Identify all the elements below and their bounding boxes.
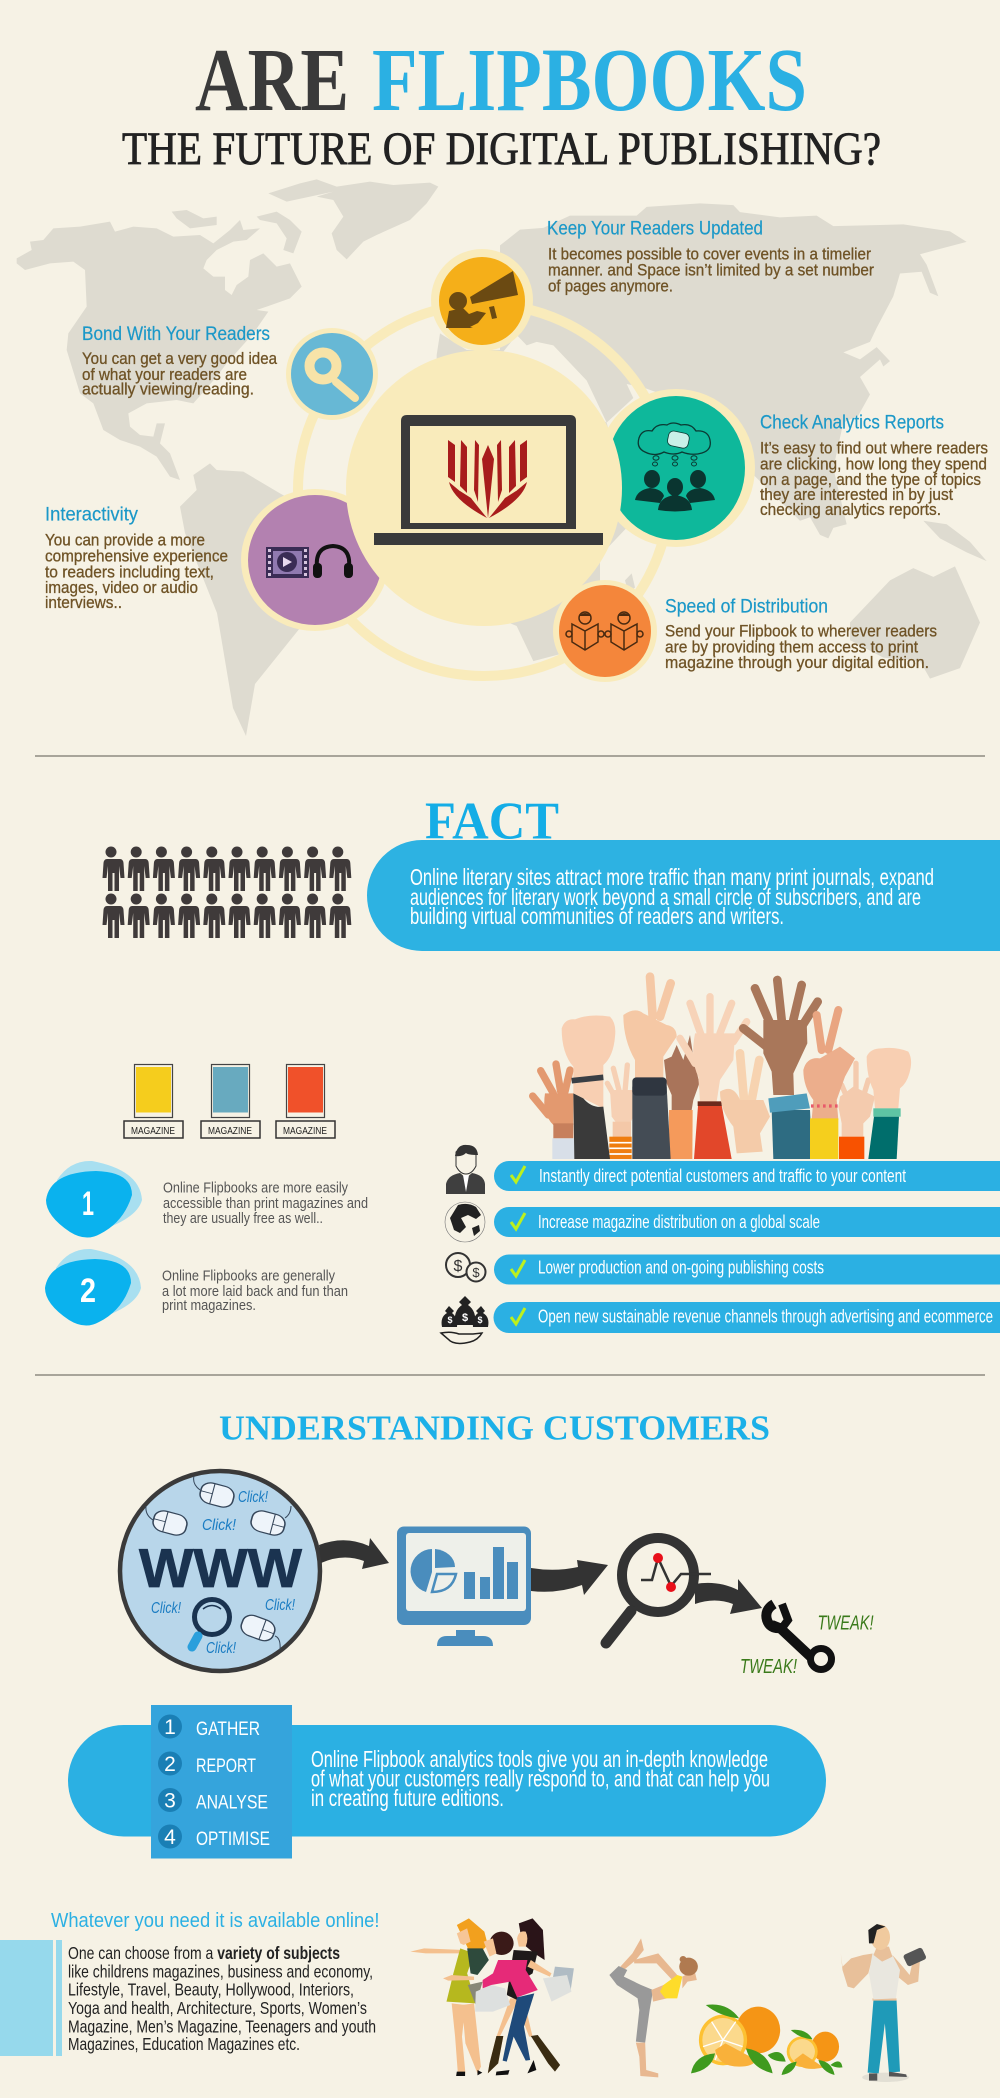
- central circle: [346, 350, 622, 626]
- icon: coins: [446, 1253, 486, 1282]
- benefit 2: Increase magazine distribution on a global scale: [538, 1212, 820, 1232]
- steps box: REPORT: [196, 1756, 256, 1777]
- hand: small light: [607, 1065, 635, 1159]
- text block: speed of distribution: Speed of Distribution: [665, 596, 828, 618]
- illustration: www clicks: WWW: [139, 1537, 302, 1599]
- text block: interactivity: to readers including text,: [45, 564, 214, 582]
- text block: bond with your readers: [82, 324, 278, 398]
- analytics callout: Online Flipbook analytics tools give you an in-depth knowledge: [311, 1746, 768, 1772]
- icon: money bags: $: [477, 1315, 483, 1325]
- text block: interactivity: comprehensive experience: [45, 548, 228, 566]
- text block: interactivity: Interactivity: [45, 504, 138, 526]
- text block: interactivity: interviews..: [45, 594, 122, 612]
- illustration: www clicks: Click!: [238, 1489, 268, 1506]
- magazine blue: [201, 1064, 260, 1138]
- icon: businessman: [446, 1145, 485, 1194]
- text block: interactivity: You can provide a more: [45, 532, 205, 550]
- text block: keep your readers updated: It becomes possible to cover events in a timelier: [548, 246, 871, 264]
- icon: people thinking about a mouse: [635, 423, 715, 512]
- icon: monitor with charts: [397, 1526, 531, 1646]
- icon: megaphone circle: [431, 249, 533, 351]
- fact callout: building virtual communities of readers and writers.: [410, 903, 784, 929]
- steps box: 3: [164, 1790, 176, 1812]
- illustration: yoga: [609, 1938, 698, 2077]
- numbered point 1: they are usually free as well..: [163, 1211, 323, 1227]
- arrow 2: [531, 1560, 608, 1595]
- icon: laptop: [374, 415, 603, 545]
- illustration: shoppers: [410, 1918, 574, 2076]
- icon: coins: $: [472, 1265, 480, 1280]
- icon: readers circle: [553, 580, 657, 682]
- hand: small left: [533, 1064, 574, 1159]
- text block: speed of distribution: magazine through your digital edition.: [665, 654, 929, 672]
- analytics callout: of what your customers really respond to, and that can help you: [311, 1766, 770, 1792]
- hand: brown peace: [664, 1035, 699, 1159]
- steps box: 1: [164, 1716, 176, 1739]
- text block: keep your readers updated: of pages anymore.: [548, 278, 673, 296]
- hand: peace pale: [720, 1053, 770, 1153]
- analytics callout: in creating future editions.: [311, 1785, 504, 1811]
- text block: keep your readers updated: Keep Your Readers Updated: [547, 218, 763, 240]
- icon: wrench with tweak labels: [740, 1604, 874, 1678]
- icon: wrench with tweak labels: TWEAK!: [818, 1612, 874, 1634]
- text block: speed of distribution: are by providing them access to print: [665, 638, 918, 656]
- illustration: raised hands: [533, 977, 911, 1159]
- ring: [298, 304, 670, 676]
- benefit 2: [494, 1207, 1000, 1237]
- text block: subjects: Magazine, Men’s Magazine, Teenagers and youth: [68, 2016, 376, 2036]
- text block: speed of distribution: Send your Flipbook to wherever readers: [665, 622, 937, 640]
- text block: interactivity: images, video or audio: [45, 579, 198, 597]
- icon: globe: [445, 1202, 485, 1242]
- arrow 3: [695, 1579, 762, 1614]
- text block: check analytics reports: they are interested in by just: [760, 486, 953, 504]
- text block: bond with your readers: of what your readers are: [82, 366, 247, 384]
- icon: coins: $: [454, 1258, 463, 1275]
- text block: subjects: One can choose from a variety of subjects: [68, 1943, 340, 1963]
- heading: understanding customers: UNDERSTANDING CUSTOMERS: [219, 1408, 770, 1448]
- numbered point 2: 2: [80, 1272, 96, 1310]
- title: FLIPBOOKS: [372, 31, 807, 130]
- numbered point 2: Online Flipbooks are generally: [162, 1268, 336, 1284]
- illustration: www clicks: Click!: [206, 1640, 236, 1657]
- title: ARE: [195, 31, 349, 130]
- illustration: www clicks: Click!: [151, 1600, 181, 1617]
- illustrations: lifestyle people and fruit: [410, 1918, 927, 2082]
- steps box: [151, 1705, 292, 1858]
- text block: subjects: like childrens magazines, business and economy,: [68, 1962, 373, 1982]
- text block: subjects: Lifestyle, Travel, Beauty, Hollywood, Interiors,: [68, 1980, 354, 2000]
- icon: analytics circle: [597, 389, 755, 547]
- steps box: OPTIMISE: [196, 1829, 270, 1850]
- text block: keep your readers updated: [547, 218, 874, 296]
- text block: interactivity: [45, 504, 228, 612]
- analytics callout: [68, 1705, 826, 1858]
- illustration: www clicks: Click!: [265, 1597, 295, 1614]
- text block: check analytics reports: It’s easy to find out where readers: [760, 440, 988, 458]
- magazine red: MAGAZINE: [283, 1125, 327, 1137]
- numbered point 1: Online Flipbooks are more easily: [163, 1180, 349, 1196]
- numbered point 2: print magazines.: [162, 1298, 256, 1314]
- arrow 1: [319, 1538, 389, 1569]
- text block: subjects: [68, 1943, 376, 2054]
- icon: wrench with tweak labels: TWEAK!: [740, 1656, 797, 1678]
- icon: magnifier circle: [286, 328, 378, 420]
- illustration: fitness man: [841, 1924, 927, 2082]
- title: [195, 31, 807, 130]
- text block: speed of distribution: [665, 596, 937, 672]
- benefit 3: Lower production and on-going publishing costs: [538, 1258, 824, 1278]
- icon: money bags: [441, 1296, 488, 1343]
- illustration: www clicks: Click!: [202, 1517, 236, 1534]
- icon: analysis magnifier: [606, 1538, 711, 1643]
- magazine blue: MAGAZINE: [208, 1125, 252, 1137]
- text block: check analytics reports: checking analytics reports.: [760, 501, 941, 519]
- heading: fact: FACT: [425, 792, 559, 850]
- world map: [17, 179, 987, 736]
- icon: interactivity circle: [241, 489, 389, 631]
- steps box: ANALYSE: [196, 1792, 268, 1814]
- hand: peace tan: [803, 1010, 855, 1159]
- benefit 4: [493, 1302, 1000, 1333]
- hand: open light: [680, 997, 747, 1159]
- numbered point 1: [46, 1161, 368, 1238]
- fact callout: [367, 840, 1000, 951]
- accent bars: [0, 1940, 62, 2056]
- text block: check analytics reports: [760, 412, 988, 519]
- hand: fist right: [867, 1048, 911, 1159]
- icon: crowd of people: [102, 846, 351, 938]
- illustration: oranges: [691, 2004, 842, 2075]
- panel: ring diagram: [241, 249, 755, 682]
- subtitle: THE FUTURE OF DIGITAL PUBLISHING?: [122, 123, 881, 175]
- text block: bond with your readers: Bond With Your Readers: [82, 324, 270, 345]
- benefit list: [441, 1145, 1000, 1343]
- icon: money bags: $: [462, 1312, 468, 1324]
- numbered point 2: a lot more laid back and fun than: [162, 1284, 348, 1300]
- hand: big brown: [743, 980, 818, 1159]
- icons: magazines: [124, 1064, 335, 1138]
- numbered point 1: accessible than print magazines and: [163, 1196, 368, 1212]
- icon: book logo: [448, 440, 527, 518]
- heading: whatever you need: Whatever you need it is available online!: [51, 1910, 380, 1932]
- icon: money bags: $: [447, 1315, 453, 1325]
- text block: bond with your readers: You can get a very good idea: [82, 350, 278, 368]
- magazine red: [276, 1064, 335, 1138]
- steps box: 4: [164, 1826, 176, 1849]
- text block: check analytics reports: are clicking, how long they spend: [760, 456, 987, 474]
- hand: small far right: [838, 1063, 875, 1159]
- numbered point 2: [45, 1249, 348, 1326]
- numbered point 1: 1: [82, 1185, 94, 1223]
- benefit 1: [494, 1161, 1000, 1191]
- hand: peace dark sleeve: [623, 977, 677, 1159]
- text block: check analytics reports: on a page, and the type of topics: [760, 471, 981, 489]
- magazine yellow: [124, 1064, 183, 1138]
- benefit 3: [494, 1254, 1000, 1284]
- magazine yellow: MAGAZINE: [131, 1125, 175, 1137]
- icon: film and headphones: [266, 546, 353, 578]
- steps box: GATHER: [196, 1719, 260, 1740]
- illustration: www clicks: [120, 1471, 320, 1671]
- text block: subjects: Magazines, Education Magazines etc.: [68, 2034, 300, 2054]
- text block: check analytics reports: Check Analytics Reports: [760, 412, 944, 434]
- text block: subjects: Yoga and health, Architecture, Sports, Women’s: [68, 1998, 367, 2018]
- hand: fist with bracelet: [562, 1015, 615, 1159]
- text block: keep your readers updated: manner. and Space isn’t limited by a set number: [548, 262, 874, 280]
- steps box: 2: [164, 1753, 176, 1776]
- text block: bond with your readers: actually viewing/reading.: [82, 380, 254, 398]
